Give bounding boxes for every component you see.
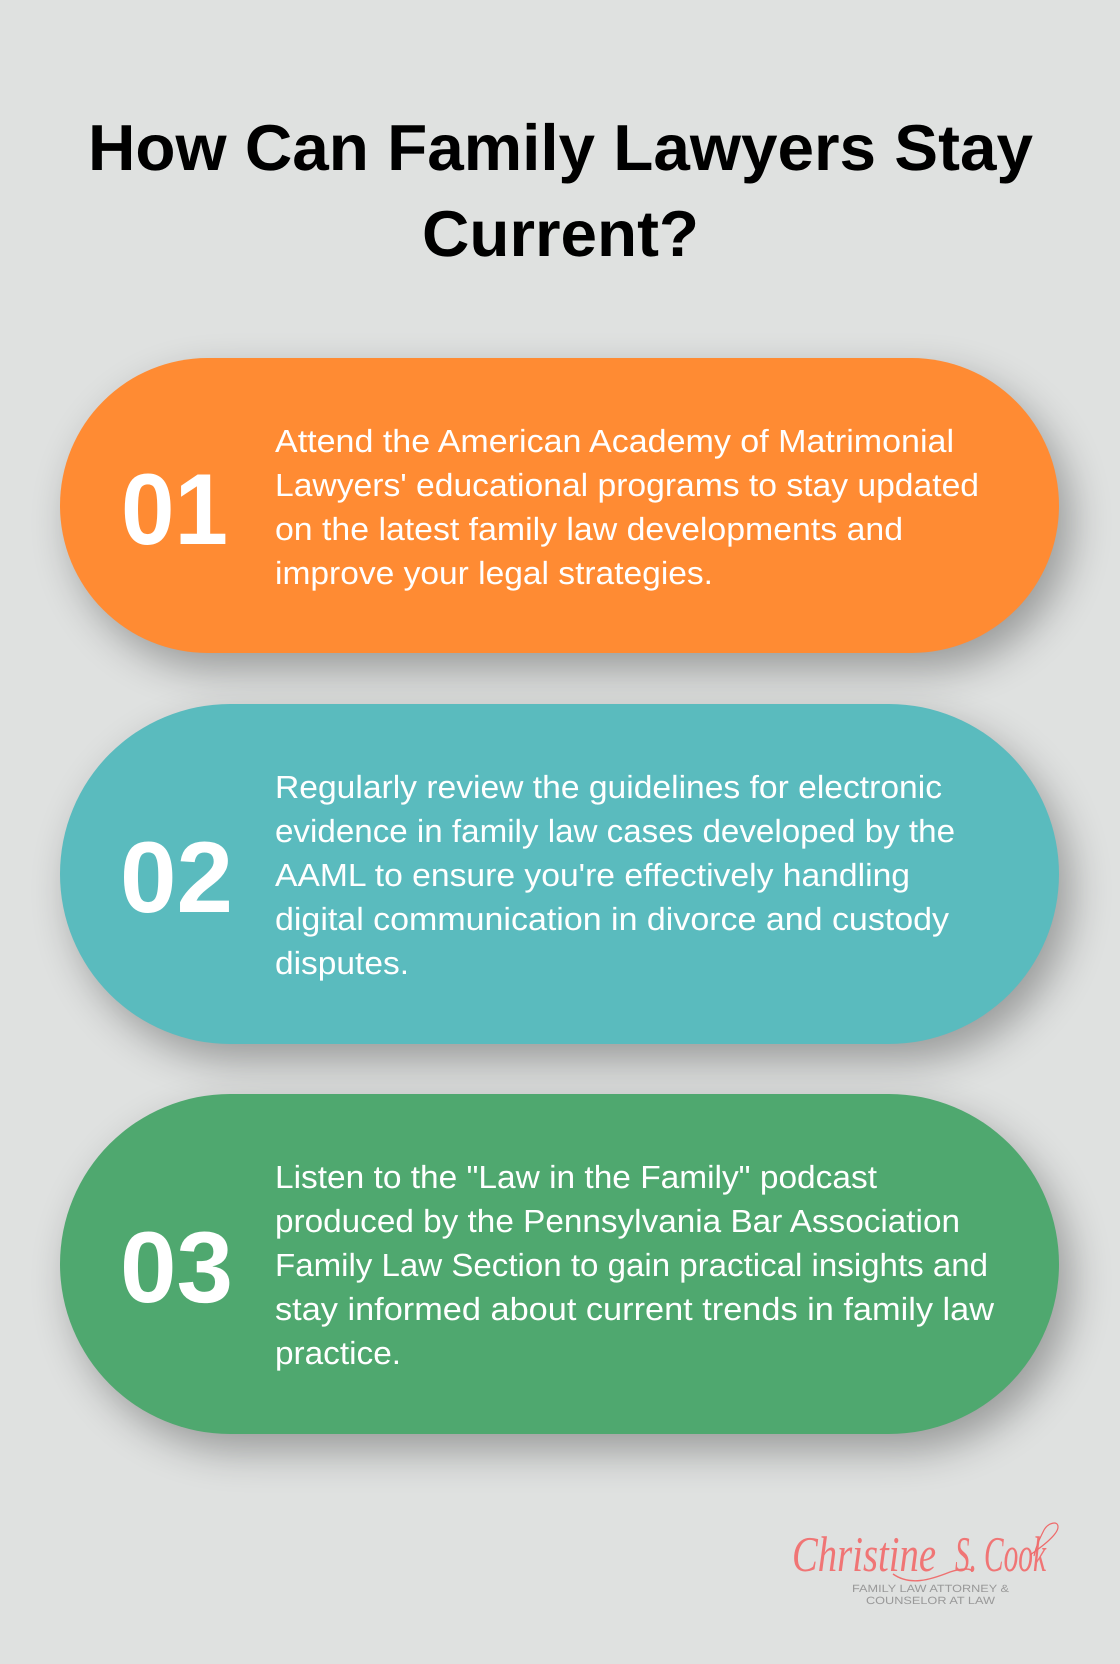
title: How Can Family Lawyers Stay [88,111,1033,184]
step number 01: 01 [121,454,228,566]
step 01 text [275,423,979,591]
step 03 text: produced by the Pennsylvania Bar Association [275,1203,960,1239]
logo tagline [852,1583,1009,1607]
step 03 text: Family Law Section to gain practical insights and [275,1247,988,1283]
logo signature: Cook [984,1526,1046,1582]
logo signature: Christine [792,1526,936,1582]
step 01 text: Lawyers' educational programs to stay updated [275,467,979,503]
step 03 text [275,1159,995,1371]
step 03 text: stay informed about current trends in family law [275,1291,995,1327]
step 01 text: Attend the American Academy of Matrimonial [275,423,954,459]
panel: step 03 [60,1094,1059,1434]
step 02 text [275,769,955,981]
title [88,111,1033,270]
logo signature: S. [955,1526,977,1582]
step 02 text: digital communication in divorce and custody [275,901,949,937]
step 02 text: AAML to ensure you're effectively handling [275,857,910,893]
logo tagline: FAMILY LAW ATTORNEY & [852,1583,1009,1595]
panel: step 01 [60,358,1059,653]
step number 02: 02 [120,822,233,934]
title: Current? [422,197,699,270]
step 01 text: on the latest family law developments and [275,511,903,547]
logo signature [792,1523,1058,1582]
step 02 text: disputes. [275,945,409,981]
logo tagline: COUNSELOR AT LAW [866,1595,995,1607]
step 02 text: Regularly review the guidelines for electronic [275,769,942,805]
step 03 text: practice. [275,1335,401,1371]
step 02 text: evidence in family law cases developed by the [275,813,955,849]
logo: Christine S. Cook [792,1522,1059,1607]
step 01 text: improve your legal strategies. [275,555,713,591]
panel: step 02 [60,704,1059,1044]
step 03 text: Listen to the "Law in the Family" podcast [275,1159,877,1195]
step number 03: 03 [120,1212,233,1324]
